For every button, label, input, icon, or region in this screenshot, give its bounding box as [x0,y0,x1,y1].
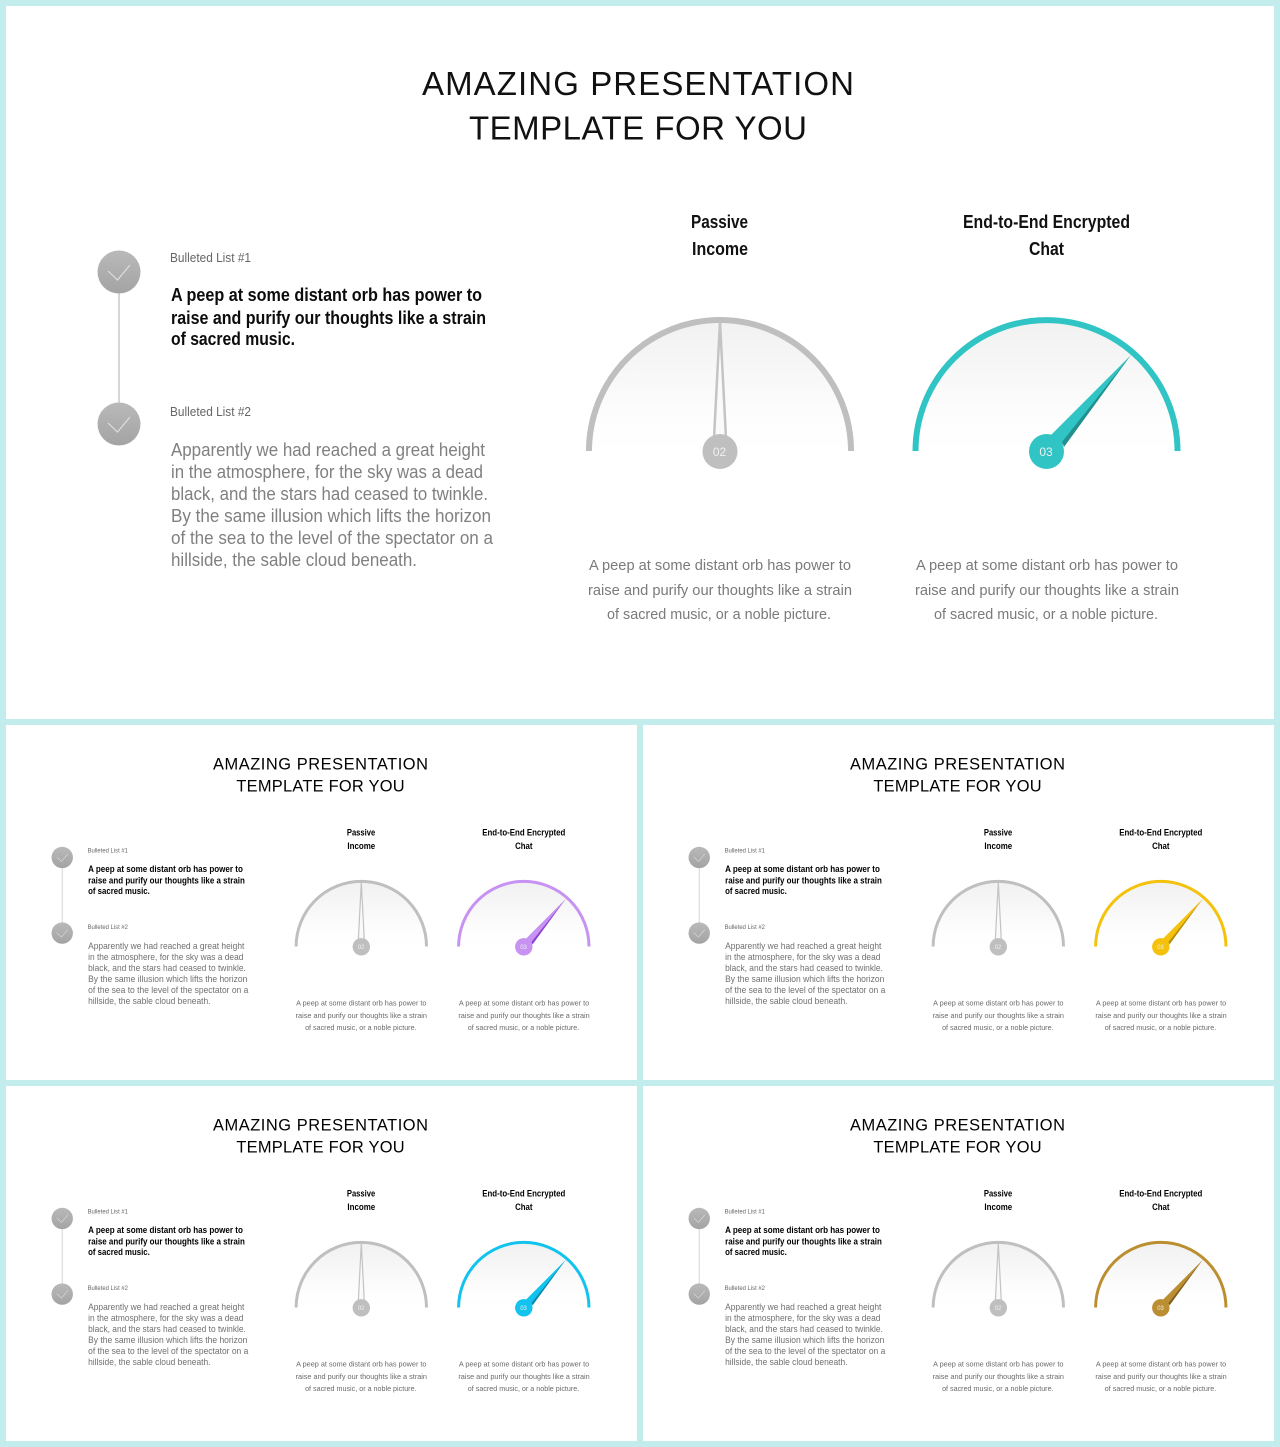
text block: bullet one: A peep at some distant orb has power to [88,1225,243,1235]
gauge: grey 02: 02 [713,445,726,459]
gauge: cyan 03 [459,1242,589,1316]
gauge: cyan 03: 03 [520,1306,528,1312]
gauge: grey 02: 02 [995,1306,1002,1312]
caption: encrypted chat: of sacred music, or a noble picture. [468,1023,579,1032]
caption: passive income: A peep at some distant orb has power to [933,1360,1064,1369]
caption: encrypted chat: raise and purify our thoughts like a strain [458,1372,590,1381]
heading: encrypted chat: Chat [515,1202,533,1212]
caption: passive income: raise and purify our thoughts like a strain [933,1372,1064,1381]
heading: encrypted chat [1119,828,1202,851]
caption: passive income: A peep at some distant orb has power to [589,557,851,574]
caption: passive income: A peep at some distant orb has power to [296,1360,427,1369]
caption: encrypted chat: raise and purify our thoughts like a strain [1095,1372,1227,1381]
heading: encrypted chat: End-to-End Encrypted [963,212,1130,232]
heading: passive income: Income [984,841,1012,851]
text block: bullet one: raise and purify our thoughts like a strain [88,1236,245,1246]
text block: bullet two: hillside, the sable cloud beneath. [725,996,848,1006]
text block: bullet one [725,847,882,896]
heading: passive income: Passive [691,212,748,232]
panel: cyan variant slide [6,1086,637,1441]
text block: bullet two: of the sea to the level of the spectator on a [725,1346,885,1356]
text block: bullet two: Bulleted List #2 [725,924,765,931]
heading: passive income: Passive [347,1189,375,1199]
gauge: yellow 03: 03 [1157,945,1165,951]
caption: passive income: raise and purify our thoughts like a strain [588,582,852,599]
caption: passive income [933,1360,1064,1393]
heading: encrypted chat: End-to-End Encrypted [482,1189,565,1199]
text block: bullet two: hillside, the sable cloud beneath. [88,996,211,1006]
gauge: grey 02 [296,881,427,955]
heading: passive income: Income [692,239,748,259]
text block: bullet one: of sacred music. [171,329,295,349]
caption: passive income: of sacred music, or a noble picture. [942,1023,1054,1032]
gauge: purple 03: 03 [520,945,528,951]
caption: encrypted chat [1095,1360,1227,1393]
text block: bullet one: of sacred music. [88,1247,150,1257]
heading: passive income [984,828,1012,851]
heading: encrypted chat [1119,1189,1202,1212]
title [850,755,1065,796]
text block: bullet two: in the atmosphere, for the sky was a dead [725,952,880,962]
text block: bullet one: of sacred music. [725,886,787,896]
text block: bullet two: Apparently we had reached a great height [725,941,882,951]
caption: encrypted chat: of sacred music, or a noble picture. [1105,1384,1216,1393]
heading: passive income: Income [347,1202,375,1212]
gauge: grey 02: 02 [995,945,1002,951]
caption: passive income [933,999,1064,1032]
heading: passive income [347,828,375,851]
title: AMAZING PRESENTATION [422,65,854,102]
gauge: grey 02 [933,881,1064,955]
caption: encrypted chat [1095,999,1227,1032]
heading: passive income: Passive [984,1189,1012,1199]
panel: yellow variant slide [643,725,1274,1080]
text block: bullet two: in the atmosphere, for the sky was a dead [171,462,483,482]
caption: encrypted chat: of sacred music, or a noble picture. [468,1384,579,1393]
text block: bullet two: hillside, the sable cloud beneath. [725,1357,848,1367]
title [213,1116,428,1157]
text block: bullet two: black, and the stars had ceased to twinkle. [88,1324,246,1334]
gauge: grey 02: 02 [358,945,365,951]
heading: passive income [984,1189,1012,1212]
text block: bullet two: hillside, the sable cloud beneath. [88,1357,211,1367]
gauge: grey 02: 02 [358,1306,365,1312]
text block: bullet one: A peep at some distant orb has power to [171,285,482,305]
text block: bullet two: Bulleted List #2 [88,1285,128,1292]
heading: passive income: Income [984,1202,1012,1212]
caption: encrypted chat: A peep at some distant orb has power to [1096,1360,1226,1369]
text block: bullet two: By the same illusion which lifts the horizon [725,1335,884,1345]
heading: encrypted chat: End-to-End Encrypted [1119,828,1202,838]
caption: encrypted chat [458,999,590,1032]
heading: passive income [691,212,748,259]
caption: passive income [296,999,427,1032]
text block: bullet two: black, and the stars had ceased to twinkle. [725,963,883,973]
heading: encrypted chat [482,1189,565,1212]
caption: encrypted chat: raise and purify our thoughts like a strain [1095,1011,1227,1020]
heading: passive income: Passive [984,828,1012,838]
heading: encrypted chat: End-to-End Encrypted [1119,1189,1202,1199]
caption: encrypted chat: of sacred music, or a noble picture. [1105,1023,1216,1032]
title [422,65,854,146]
panel: purple variant slide [6,725,637,1080]
text block: bullet two: of the sea to the level of the spectator on a [171,528,494,548]
title: AMAZING PRESENTATION [213,755,428,773]
gauge: teal 03 [916,320,1178,469]
text block: bullet one: A peep at some distant orb has power to [88,864,243,874]
heading: encrypted chat: Chat [1152,1202,1170,1212]
panel: main slide [6,6,1274,719]
text block: bullet two: black, and the stars had ceased to twinkle. [171,484,488,504]
title: TEMPLATE FOR YOU [873,778,1042,796]
caption: passive income: raise and purify our thoughts like a strain [296,1372,427,1381]
title [850,1116,1065,1157]
text block: bullet one [725,1208,882,1257]
text block: bullet one [88,847,245,896]
caption: encrypted chat: raise and purify our thoughts like a strain [458,1011,590,1020]
text block: bullet one: of sacred music. [88,886,150,896]
caption: passive income: A peep at some distant orb has power to [933,999,1064,1008]
text block: bullet two: in the atmosphere, for the sky was a dead [725,1313,880,1323]
text block: bullet two [725,924,885,1006]
text block: bullet one: Bulleted List #1 [88,847,128,854]
caption: encrypted chat [458,1360,590,1393]
caption: encrypted chat: raise and purify our thoughts like a strain [915,582,1179,599]
heading: passive income [347,1189,375,1212]
text block: bullet two: Apparently we had reached a great height [725,1302,882,1312]
text block: bullet one: raise and purify our thoughts like a strain [725,875,882,885]
gauge: bronze 03: 03 [1157,1306,1165,1312]
caption: encrypted chat: A peep at some distant orb has power to [1096,999,1226,1008]
text block: bullet two: of the sea to the level of the spectator on a [88,985,248,995]
title: AMAZING PRESENTATION [850,1116,1065,1134]
gauge: grey 02 [296,1242,427,1316]
timeline: bulleted list markers [689,847,710,944]
heading: passive income: Passive [347,828,375,838]
timeline: bulleted list markers [52,1208,73,1305]
title: AMAZING PRESENTATION [850,755,1065,773]
caption: passive income [296,1360,427,1393]
title [213,755,428,796]
gauge: grey 02 [589,320,851,469]
caption: passive income: of sacred music, or a noble picture. [942,1384,1054,1393]
heading: encrypted chat [963,212,1130,259]
title: TEMPLATE FOR YOU [236,778,405,796]
heading: encrypted chat: Chat [1152,841,1170,851]
heading: passive income: Income [347,841,375,851]
title: AMAZING PRESENTATION [213,1116,428,1134]
gauge: grey 02 [933,1242,1064,1316]
text block: bullet two [725,1285,885,1367]
text block: bullet two: black, and the stars had ceased to twinkle. [88,963,246,973]
text block: bullet two [88,1285,248,1367]
gauge: yellow 03 [1096,881,1226,955]
timeline: bulleted list markers [98,250,140,446]
text block: bullet two: Apparently we had reached a great height [171,440,485,460]
text block: bullet one: raise and purify our thoughts like a strain [725,1236,882,1246]
text block: bullet two: of the sea to the level of the spectator on a [88,1346,248,1356]
heading: encrypted chat: Chat [1029,239,1064,259]
text block: bullet two: in the atmosphere, for the sky was a dead [88,1313,243,1323]
text block: bullet two [88,924,248,1006]
text block: bullet one: Bulleted List #1 [725,1208,765,1215]
caption: encrypted chat: of sacred music, or a noble picture. [934,606,1158,623]
timeline: bulleted list markers [52,847,73,944]
text block: bullet one: raise and purify our thoughts like a strain [171,308,486,328]
text block: bullet two: By the same illusion which lifts the horizon [725,974,884,984]
text block: bullet two: Bulleted List #2 [170,405,251,419]
caption: encrypted chat [915,557,1179,623]
text block: bullet one [88,1208,245,1257]
heading: encrypted chat [482,828,565,851]
heading: encrypted chat: Chat [515,841,533,851]
caption: encrypted chat: A peep at some distant orb has power to [459,1360,589,1369]
text block: bullet two [170,405,494,570]
text block: bullet one: Bulleted List #1 [170,251,251,265]
caption: passive income: raise and purify our thoughts like a strain [933,1011,1064,1020]
caption: encrypted chat: A peep at some distant orb has power to [916,557,1178,574]
text block: bullet two: By the same illusion which lifts the horizon [88,1335,247,1345]
caption: encrypted chat: A peep at some distant orb has power to [459,999,589,1008]
text block: bullet one: A peep at some distant orb has power to [725,1225,880,1235]
caption: passive income: of sacred music, or a noble picture. [607,606,831,623]
caption: passive income: raise and purify our thoughts like a strain [296,1011,427,1020]
text block: bullet two: of the sea to the level of the spectator on a [725,985,885,995]
title: TEMPLATE FOR YOU [469,110,807,146]
gauge: teal 03: 03 [1039,445,1053,459]
gauge: bronze 03 [1096,1242,1226,1316]
text block: bullet one: A peep at some distant orb has power to [725,864,880,874]
caption: passive income: of sacred music, or a noble picture. [305,1384,417,1393]
caption: passive income [588,557,852,623]
text block: bullet one: raise and purify our thoughts like a strain [88,875,245,885]
text block: bullet two: By the same illusion which lifts the horizon [171,506,491,526]
gauge: purple 03 [459,881,589,955]
caption: passive income: A peep at some distant orb has power to [296,999,427,1008]
text block: bullet one: of sacred music. [725,1247,787,1257]
timeline: bulleted list markers [689,1208,710,1305]
text block: bullet two: Apparently we had reached a great height [88,941,245,951]
title: TEMPLATE FOR YOU [236,1139,405,1157]
text block: bullet two: Bulleted List #2 [725,1285,765,1292]
text block: bullet two: Bulleted List #2 [88,924,128,931]
text block: bullet two: black, and the stars had ceased to twinkle. [725,1324,883,1334]
text block: bullet two: By the same illusion which lifts the horizon [88,974,247,984]
caption: passive income: of sacred music, or a noble picture. [305,1023,417,1032]
text block: bullet one: Bulleted List #1 [725,847,765,854]
heading: encrypted chat: End-to-End Encrypted [482,828,565,838]
title: TEMPLATE FOR YOU [873,1139,1042,1157]
panel: bronze variant slide [643,1086,1274,1441]
text block: bullet one: Bulleted List #1 [88,1208,128,1215]
text block: bullet two: Apparently we had reached a great height [88,1302,245,1312]
text block: bullet one [170,251,486,349]
text block: bullet two: in the atmosphere, for the sky was a dead [88,952,243,962]
text block: bullet two: hillside, the sable cloud beneath. [171,550,417,570]
